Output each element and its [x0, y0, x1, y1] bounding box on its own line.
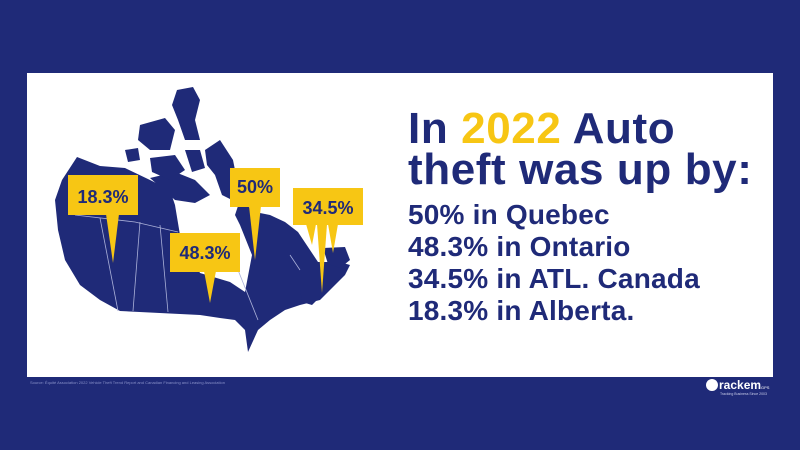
nova scotia: [300, 280, 327, 305]
logo: Tracking Business Since 2003: [720, 392, 767, 396]
text: 18.3% in Alberta.: [408, 295, 634, 326]
province lines: [75, 215, 300, 320]
callout: 34.5%: 34.5%: [302, 198, 354, 218]
callout: 18.3%: [68, 175, 138, 263]
callout: 48.3%: [170, 233, 240, 303]
callout: 18.3%: 18.3%: [77, 187, 129, 207]
callout: 50%: [230, 168, 280, 260]
logo: GPS: [761, 385, 770, 390]
callout: 48.3%: 48.3%: [179, 243, 231, 263]
stats list: [408, 199, 700, 326]
arctic islands: [172, 87, 200, 140]
headline: In 2022 Auto: [408, 104, 675, 153]
white panel: [27, 73, 773, 377]
mainland: [55, 157, 350, 352]
text: 50% in Quebec: [408, 199, 610, 230]
text: 34.5% in ATL. Canada: [408, 263, 700, 294]
text: 48.3% in Ontario: [408, 231, 631, 262]
logo: rackem: [719, 378, 761, 392]
text: theft was up by:: [408, 145, 752, 194]
source note: Source: Équité Association 2022 Vehicle Theft Trend Report and Canadian Financing and Leasing Association: [30, 380, 225, 385]
callout: 34.5%: [293, 188, 363, 293]
callout: 50%: 50%: [237, 177, 273, 197]
newfoundland: [323, 247, 350, 268]
logo: [706, 378, 770, 396]
arctic coast land: [150, 172, 210, 203]
